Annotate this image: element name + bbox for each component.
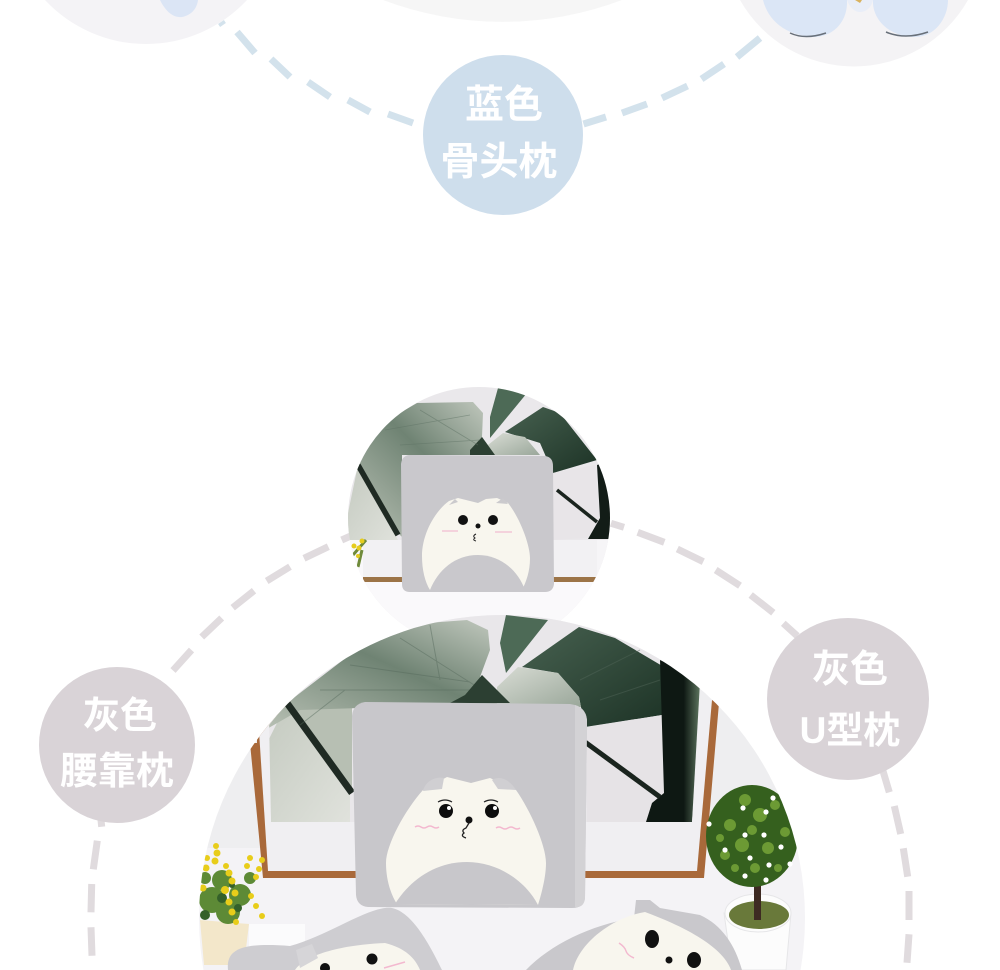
callout: blue bone pillow: 蓝色 <box>465 84 543 127</box>
photo circle: small grey lumbar pillow <box>348 387 610 629</box>
leaf print <box>262 612 707 822</box>
photo circle: top left (cropped) <box>45 0 247 44</box>
callout: grey lumbar pillow: 灰色 <box>83 695 157 736</box>
small pillow <box>401 455 554 592</box>
large lumbar pillow <box>352 702 587 908</box>
table <box>190 848 810 970</box>
tree <box>706 785 798 970</box>
photo circle: large grey lumbar pillow scene <box>190 610 810 970</box>
picture frame <box>250 700 719 878</box>
callout: grey U pillow: U型枕 <box>800 710 900 751</box>
bottom-right pillow <box>526 900 742 970</box>
callout: grey lumbar pillow: 腰靠枕 <box>60 751 174 793</box>
callout: blue bone pillow: 骨头枕 <box>440 141 558 184</box>
dashed arc: blue <box>221 22 760 124</box>
dashed arc: grey <box>91 523 909 963</box>
bottom-left pillow <box>228 908 442 970</box>
callout: grey U pillow <box>767 618 929 780</box>
photo circle: top centre (cropped) <box>383 0 622 22</box>
callout: blue bone pillow <box>423 55 583 215</box>
photo circle: top right with blue bone pillow (cropped) <box>740 0 968 66</box>
callout: grey lumbar pillow <box>39 667 195 823</box>
flowers <box>199 843 265 965</box>
wall background <box>208 688 778 848</box>
callout: grey U pillow: 灰色 <box>812 649 888 691</box>
note card <box>249 924 305 948</box>
